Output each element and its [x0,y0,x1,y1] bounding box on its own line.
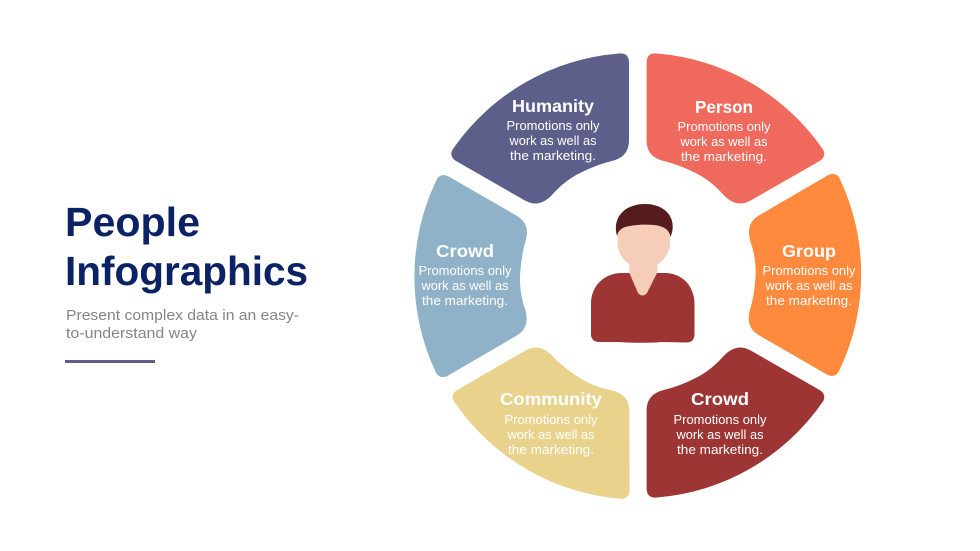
heading: person: Person [695,97,753,117]
text: crowd blue [418,264,512,308]
icon face [618,222,670,266]
text: crowd blue: Promotions only [418,264,512,278]
icon neck [629,258,658,296]
text: crowd red [674,413,767,457]
segment: person [647,53,824,204]
segment: crowd red [647,348,824,498]
subtitle [66,307,299,342]
subtitle: Present complex data in an easy- [66,307,299,324]
panel: group [705,150,923,379]
segment: community [450,319,669,548]
segment: humanity [451,53,629,204]
panel: humanity [451,53,629,204]
title: Infographics [65,248,308,294]
icon hair [616,204,673,237]
text: community [504,413,598,457]
heading: group: Group [782,241,836,261]
text: crowd red: the marketing. [677,443,763,457]
text: person: work as well as [679,135,768,149]
text: crowd red: work as well as [675,428,764,442]
text: person [678,120,771,164]
title [65,199,308,294]
text: group: Promotions only [762,264,856,278]
text: crowd blue: the marketing. [422,294,508,308]
heading: crowd blue: Crowd [436,241,494,261]
text: humanity [506,119,600,163]
text: community: Promotions only [504,413,598,427]
panel: person [647,53,824,204]
subtitle: to-understand way [66,325,198,342]
segment: crowd blue [352,172,571,401]
icon: person [591,204,694,343]
panel: crowd red [647,348,824,498]
text: humanity: work as well as [508,134,596,148]
text: person: the marketing. [681,150,767,164]
accent line [65,360,155,363]
text: community: work as well as [506,428,594,442]
text: crowd red: Promotions only [674,413,767,427]
icon body [591,273,694,343]
heading: humanity: Humanity [512,96,594,116]
segment: group [705,150,923,379]
text: community: the marketing. [508,443,594,457]
text: humanity: Promotions only [506,119,600,133]
text: person: Promotions only [678,120,771,134]
text: crowd blue: work as well as [420,279,508,293]
title: People [65,199,200,245]
heading: crowd red: Crowd [691,389,749,409]
text: group: work as well as [764,279,852,293]
heading: community: Community [500,389,602,409]
text: group [762,264,856,308]
panel: crowd blue [352,172,571,401]
panel: community [450,319,669,548]
text: humanity: the marketing. [510,149,596,163]
text: group: the marketing. [766,294,852,308]
